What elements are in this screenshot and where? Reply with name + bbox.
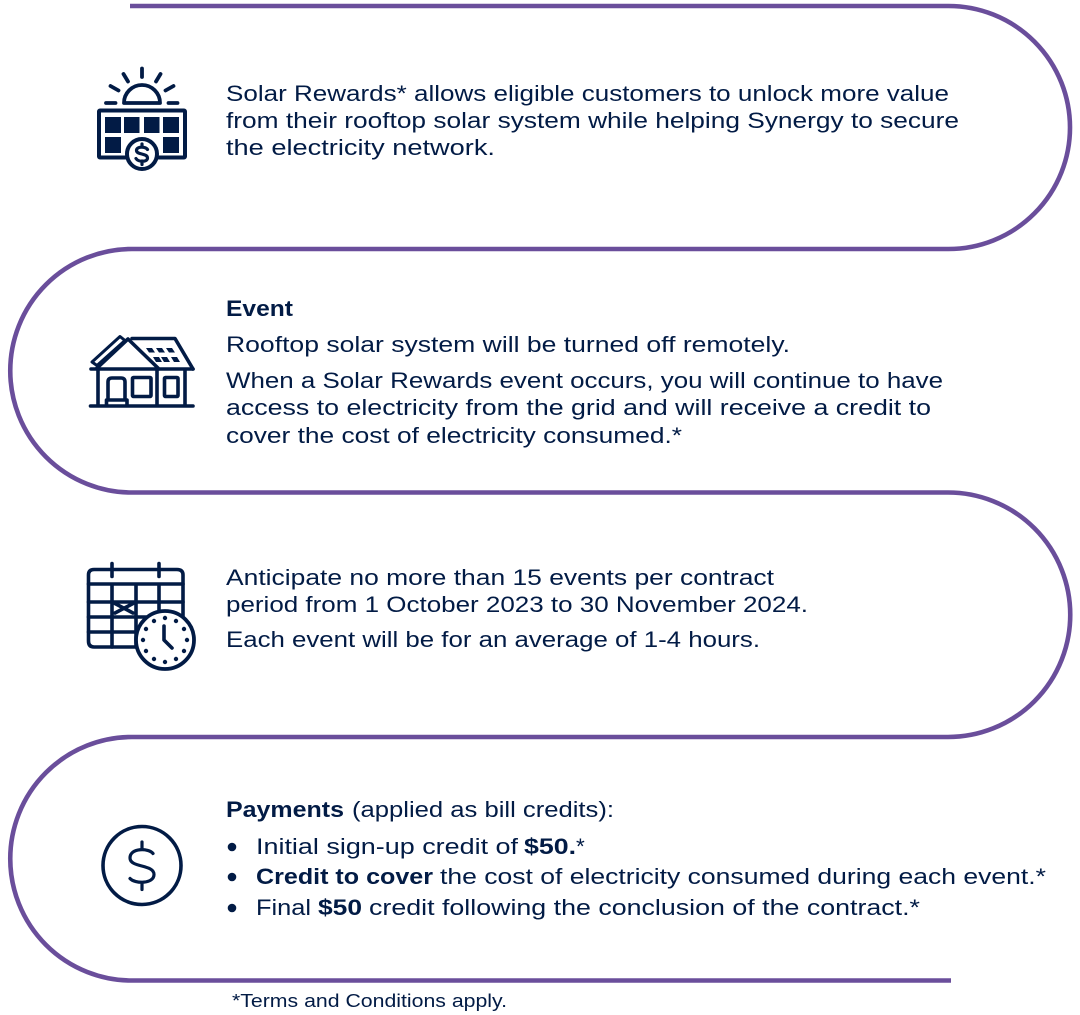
list: payment items: $50 [318,895,362,920]
list: payment items: Initial sign-up credit of [256,834,519,859]
text: intro paragraph: Solar Rewards* allows eligible customers to unlock more value [226,81,949,106]
list: payment items: Final [256,895,311,920]
list: payment items [228,834,1046,920]
text: event description: access to electricity from the grid and will receive a credit to [226,395,931,420]
footnote: *Terms and Conditions apply. [232,990,507,1011]
text: event description: When a Solar Rewards event occurs, you will continue to have [226,368,943,393]
panel: event frequency [88,564,808,669]
text: event frequency details: period from 1 October 2023 to 30 November 2024. [226,592,808,617]
text: intro paragraph: the electricity network. [226,135,495,160]
panel: payments [103,797,1046,920]
text: intro paragraph: from their rooftop solar system while helping Synergy to secure [226,108,959,133]
icon: sun over solar panel with dollar coin [99,68,185,169]
list: payment items: Credit to cover [256,864,433,889]
text: event frequency details: Each event will be for an average of 1-4 hours. [226,627,760,652]
text: event description [226,296,943,448]
text: payments heading [226,797,614,822]
icon: house with rooftop solar [90,336,193,406]
icon: calendar with clock [88,564,194,669]
text: event description: Event [226,296,294,321]
text: event frequency details: Anticipate no more than 15 events per contract [226,565,775,590]
text: intro paragraph [226,81,959,160]
list: payment items: * [576,834,585,859]
panel: event [90,296,943,448]
text: event description: Rooftop solar system will be turned off remotely. [226,332,790,357]
list: payment items: $50. [524,834,576,859]
text: event frequency details [226,565,808,652]
list: payment items: credit following the conclusion of the contract.* [369,895,920,920]
icon: dollar in circle [103,826,181,904]
panel: solar rewards intro [99,68,959,169]
text: payments heading: Payments [226,797,344,822]
list: payment items: the cost of electricity consumed during each event.* [440,864,1046,889]
text: payments heading: (applied as bill credits): [352,797,614,822]
text: event description: cover the cost of electricity consumed.* [226,423,682,448]
